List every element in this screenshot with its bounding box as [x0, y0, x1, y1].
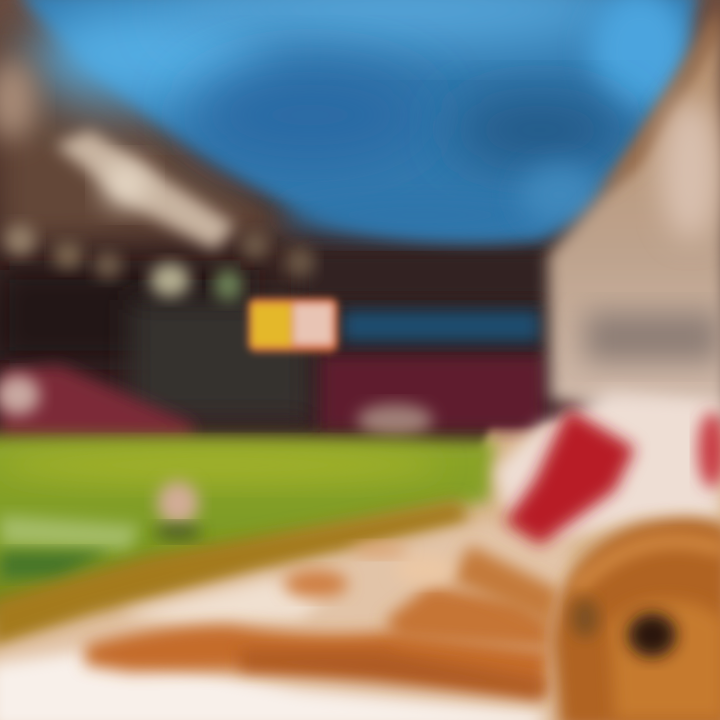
- red seating left: [0, 365, 195, 440]
- orange pitch edge: [0, 500, 470, 650]
- yellow and white scoreboard: [248, 298, 338, 352]
- white paper wrapper: [495, 392, 720, 540]
- foreground table base: [0, 425, 720, 720]
- fried snacks: [85, 543, 560, 700]
- large fried ring in the corner: [552, 519, 720, 720]
- football: [154, 481, 202, 540]
- red ketchup sachet: [505, 408, 720, 545]
- blue scoreboard band: [342, 310, 540, 342]
- stadium roof lights: [0, 60, 315, 301]
- cardboard box on the right: [548, 0, 720, 430]
- stadium stands background: [0, 0, 720, 460]
- red seating right: [320, 355, 545, 436]
- white tablecloth: [0, 520, 570, 720]
- grass pitch: [0, 436, 495, 625]
- sky with storm clouds: [18, 0, 700, 242]
